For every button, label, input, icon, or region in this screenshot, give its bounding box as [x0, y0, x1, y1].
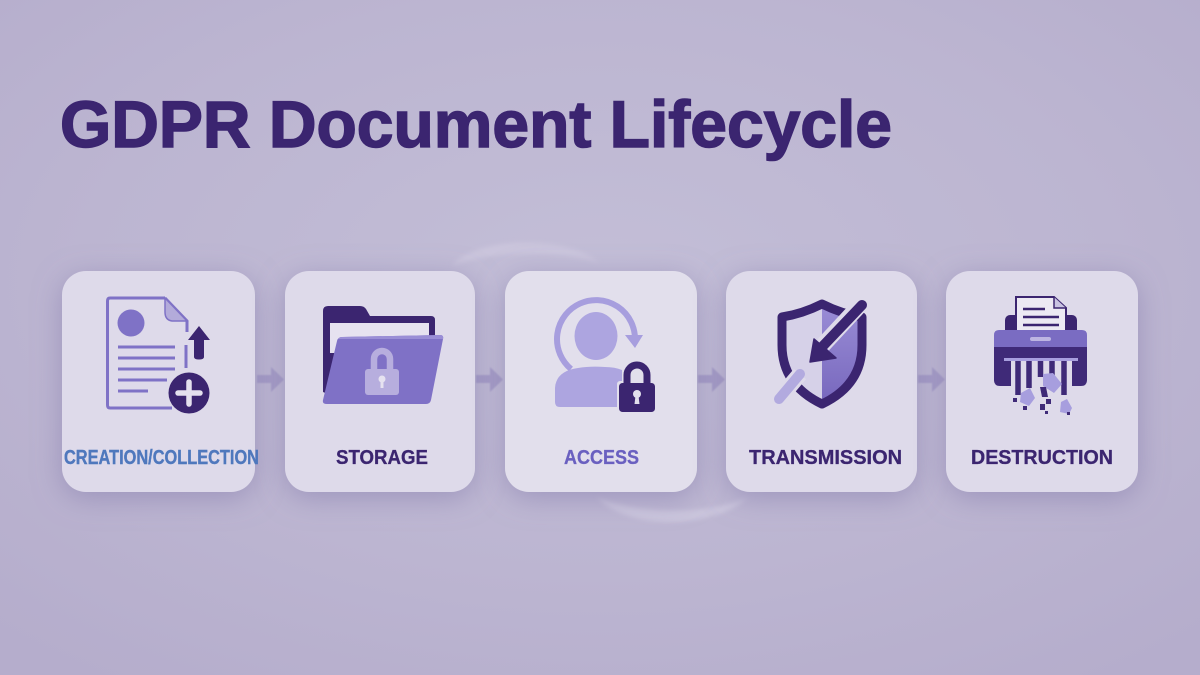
- label: DESTRUCTION: [971, 447, 1113, 469]
- arrow: storage to access: [476, 367, 503, 392]
- card background: [726, 271, 917, 492]
- arrow: transmission to destruction: [918, 367, 945, 392]
- label: STORAGE: [336, 447, 428, 469]
- card background: [62, 271, 255, 492]
- panel: destruction: [946, 271, 1138, 492]
- panel: creation/collection: [62, 271, 259, 492]
- panel: access: [505, 271, 697, 492]
- icon: shield with arrow: [778, 304, 862, 404]
- card background: [505, 271, 697, 492]
- panel: transmission: [726, 271, 917, 492]
- title: GDPR Document Lifecycle: [60, 87, 892, 161]
- label: CREATION/COLLECTION: [64, 447, 259, 469]
- card background: [946, 271, 1138, 492]
- label: ACCESS: [564, 447, 639, 469]
- panel: storage: [285, 271, 475, 492]
- icon: document with upload and plus: [108, 298, 210, 414]
- arrow: access to transmission: [698, 367, 725, 392]
- arrow: creation to storage: [257, 367, 284, 392]
- icon: locked folder: [323, 306, 443, 404]
- card background: [285, 271, 475, 492]
- icon: user with lock: [555, 300, 657, 414]
- label: TRANSMISSION: [749, 447, 902, 469]
- icon: shredder: [994, 297, 1087, 415]
